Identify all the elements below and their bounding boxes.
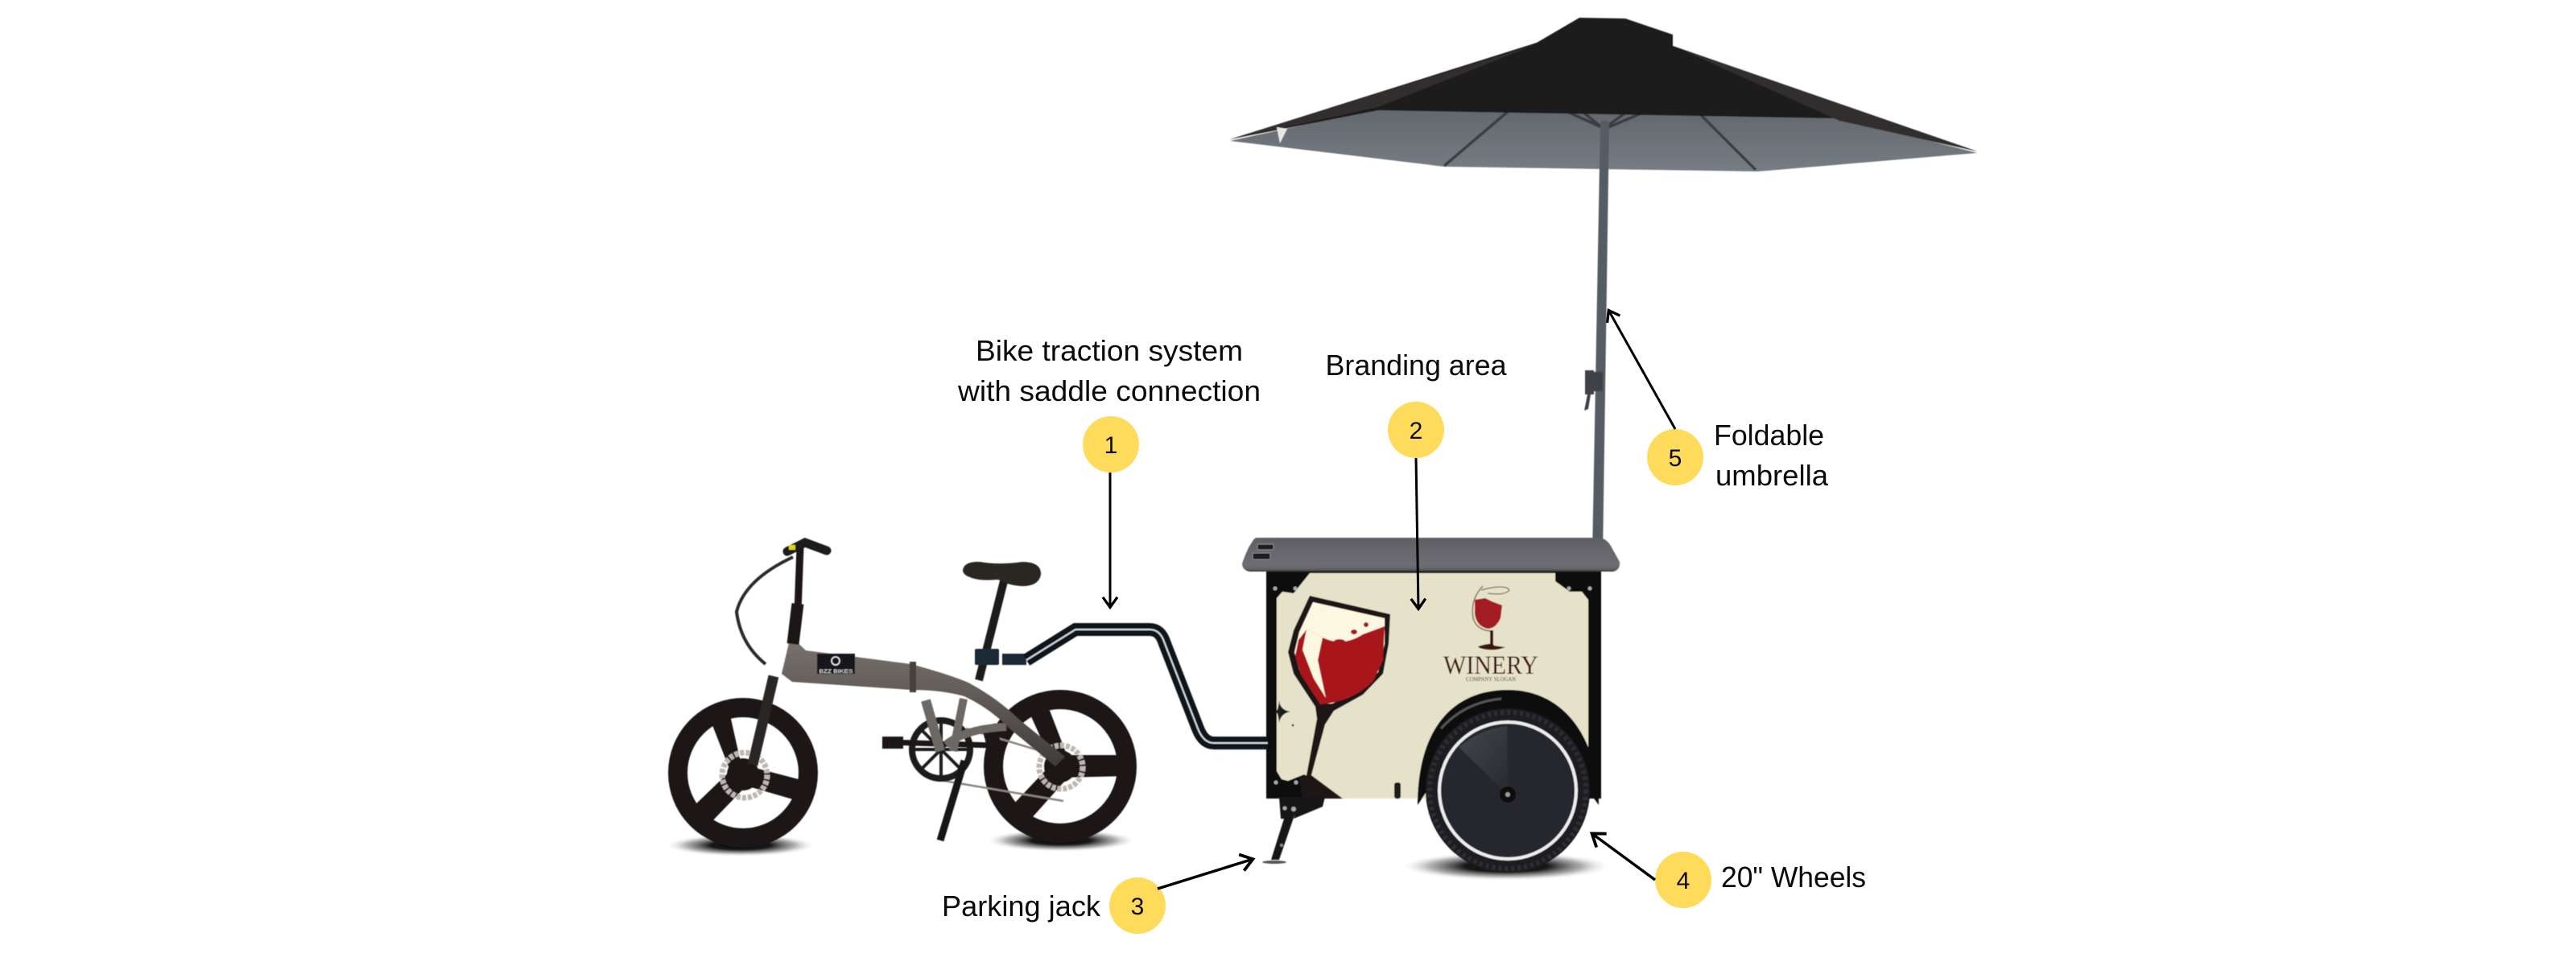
brake cable	[737, 557, 793, 664]
frame logo	[817, 654, 855, 675]
umbrella ribs	[1444, 110, 1756, 170]
badge 1: 1	[1104, 432, 1117, 459]
badge 2: 2	[1410, 418, 1422, 444]
arrow 3	[1158, 859, 1253, 889]
wheel cover highlight	[1459, 726, 1508, 795]
badge 5: 5	[1669, 445, 1682, 472]
chain, chainring and crank	[882, 720, 1063, 801]
label 1	[957, 334, 1261, 407]
label 4: 20" Wheels	[1721, 861, 1866, 894]
front wheel	[678, 708, 808, 838]
parking jack	[1262, 797, 1325, 864]
handlebar	[787, 543, 827, 551]
label 5	[1714, 419, 1829, 492]
cart	[1242, 538, 1620, 881]
pole clamp and crank	[1584, 370, 1603, 411]
badge 2	[1388, 402, 1444, 458]
cart body frame	[1266, 570, 1601, 799]
panel latch	[1394, 782, 1401, 799]
wine glass graphic	[1288, 596, 1390, 799]
cup holders	[1253, 544, 1274, 559]
trailer tow arm	[1026, 630, 1268, 743]
label 3: Parking jack	[942, 890, 1101, 923]
callout 5: foldable umbrella	[1608, 310, 1829, 492]
umbrella	[1230, 18, 1977, 555]
frame logo: BZZ BIKES	[819, 670, 853, 675]
saddle connection clamp	[975, 649, 1026, 665]
callout 3: parking jack	[942, 859, 1253, 934]
label 5: umbrella	[1715, 459, 1829, 492]
wine droplets	[1334, 622, 1368, 644]
glass highlight	[1302, 630, 1326, 698]
arrow 4	[1591, 833, 1655, 880]
wine	[1295, 626, 1385, 704]
glass interior	[1294, 602, 1385, 704]
table top	[1242, 538, 1620, 572]
badge 1	[1083, 416, 1139, 473]
umbrella canopy	[1230, 18, 1977, 151]
badge 4: 4	[1677, 868, 1690, 894]
badge 3: 3	[1131, 894, 1144, 920]
bicycle	[665, 543, 1268, 857]
stem and head tube	[798, 547, 800, 612]
wheel fender	[1418, 690, 1599, 805]
company slogan: COMPANY SLOGAN	[1466, 676, 1516, 683]
umbrella tear highlight	[1277, 127, 1287, 143]
badge 3	[1109, 877, 1166, 934]
rear frame tubes	[926, 699, 1006, 751]
sparkle	[1276, 700, 1294, 727]
branding panel	[1277, 573, 1588, 799]
20 inch wheel	[1426, 708, 1590, 873]
callout 1: bike traction system	[957, 334, 1261, 608]
arrow 2	[1416, 458, 1418, 609]
rear wheel	[993, 700, 1127, 833]
callout 2: branding area	[1325, 349, 1507, 609]
label 1: Bike traction system	[976, 334, 1243, 367]
small glass	[1472, 586, 1509, 650]
callout 4: wheels	[1591, 833, 1866, 908]
badge 5	[1647, 429, 1703, 485]
winery logo	[1443, 586, 1538, 683]
panel rivets	[1274, 586, 1592, 784]
fork	[753, 676, 774, 765]
frame clamp band	[910, 662, 916, 692]
badge 4	[1655, 852, 1711, 908]
seat post	[979, 581, 1004, 680]
wheel shadow	[1400, 852, 1612, 881]
umbrella pole	[1592, 121, 1609, 555]
glass outline	[1288, 596, 1390, 799]
umbrella side flaps	[1230, 44, 1977, 151]
kickstand	[940, 761, 964, 840]
label 2: Branding area	[1325, 349, 1507, 382]
arrow 5	[1608, 310, 1675, 429]
main frame	[782, 636, 1065, 766]
bike shadows	[665, 829, 1137, 857]
label 1: with saddle connection	[957, 374, 1261, 407]
stem lower folding joint	[793, 604, 798, 644]
saddle	[963, 562, 1041, 586]
umbrella underside	[1230, 109, 1977, 171]
label 5: Foldable	[1714, 419, 1824, 452]
winery wordmark: WINERY	[1443, 651, 1538, 680]
arrow 1	[1109, 473, 1111, 608]
fender highlight	[1441, 699, 1501, 729]
